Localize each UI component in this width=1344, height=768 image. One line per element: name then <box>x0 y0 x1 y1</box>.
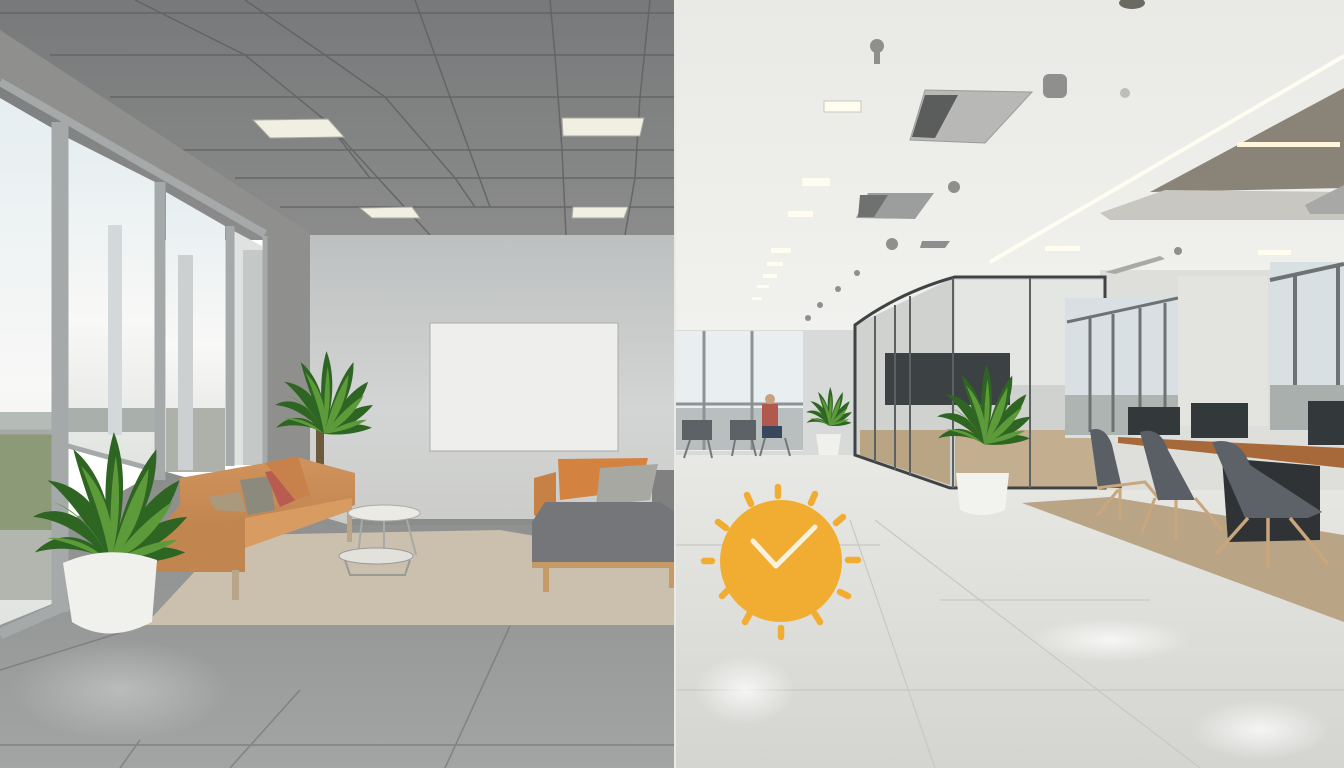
window glass <box>0 98 263 625</box>
ceiling soffit with linear light <box>990 56 1344 262</box>
ceiling: dark acoustic tiles <box>0 0 675 240</box>
right side windows <box>1065 262 1344 438</box>
far wall with windows <box>675 330 855 455</box>
bright ceiling <box>675 0 1344 330</box>
polished floor <box>675 455 1344 768</box>
ceiling fixtures <box>805 0 1182 321</box>
sofa cushions <box>240 476 275 515</box>
air vents <box>856 90 1165 274</box>
seated person and chairs <box>682 394 790 458</box>
right half: bright interior <box>675 0 1344 768</box>
glass meeting room <box>855 277 1105 488</box>
left half: conventional interior <box>0 0 675 768</box>
recessed ceiling lights <box>752 101 1291 300</box>
tall plant <box>275 351 373 475</box>
floor reflections <box>695 618 1330 760</box>
vertical divider <box>674 0 676 768</box>
central potted plant <box>937 365 1031 515</box>
rug <box>145 530 675 625</box>
floor reflection <box>10 640 230 740</box>
right back wall <box>1100 270 1344 495</box>
large potted plant <box>33 432 187 634</box>
icon: sun with check mark <box>704 487 858 637</box>
window frames <box>0 82 265 634</box>
check mark <box>753 527 815 566</box>
sun rays <box>704 487 858 637</box>
gray lounge chair <box>532 458 675 592</box>
concrete bulkhead above windows <box>0 30 310 480</box>
back wall <box>310 235 675 525</box>
round coffee tables <box>339 505 420 575</box>
background plant <box>806 387 852 455</box>
white canvas on wall <box>430 323 618 451</box>
floor <box>0 470 675 768</box>
orange sofa <box>140 456 355 600</box>
workstation table and chairs <box>1090 401 1344 568</box>
ceiling light panels <box>253 118 644 218</box>
city view <box>0 412 52 432</box>
wall base strip <box>350 519 675 529</box>
woven floor rug <box>1022 497 1344 622</box>
